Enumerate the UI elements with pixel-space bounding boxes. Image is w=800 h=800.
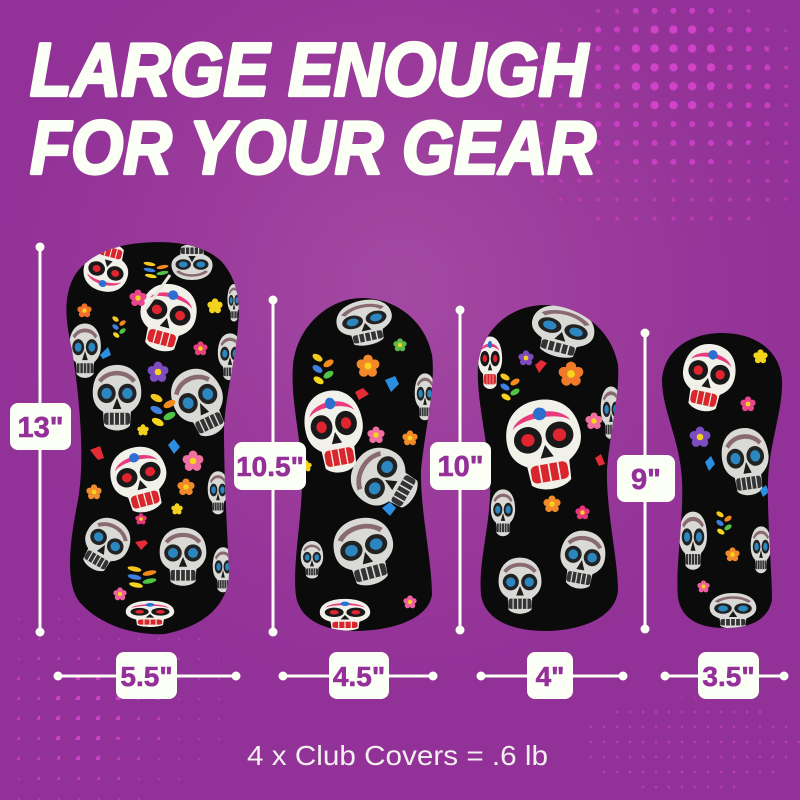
width measure: 5.5 inches [54,652,240,699]
title: FOR YOUR GEAR [30,106,596,190]
width measure: 4.5 inches: 4.5" [333,661,385,692]
club cover 1: driver [60,238,245,638]
width measure: 4.5 inches [278,652,438,699]
height measure: 10.5 inches: 10.5" [236,451,304,482]
height measure: 9 inches [617,328,675,634]
height measure: 10.5 inches [234,296,306,636]
width measure: 4 inches [476,652,628,699]
club cover 3: hybrid [478,305,618,631]
height measure: 9 inches: 9" [631,464,661,496]
height measure: 10 inches: 10" [437,451,484,483]
club cover 4: putter [662,333,782,628]
width measure: 4 inches: 4" [536,661,564,692]
width measure: 3.5 inches [660,652,788,699]
height measure: 13 inches: 13" [17,412,64,444]
weight note: 4 x Club Covers = .6 lb [247,740,548,771]
club cover 2: fairway wood [292,298,433,631]
title [30,28,596,190]
halftone dots: bottom right [580,697,800,793]
height measure: 13 inches [10,242,71,636]
width measure: 5.5 inches: 5.5" [120,661,173,692]
height measure: 10 inches [430,306,491,634]
title: LARGE ENOUGH [30,28,590,112]
halftone dots: top right [513,0,800,235]
halftone dots: bottom left [0,590,230,800]
width measure: 3.5 inches: 3.5" [702,661,755,692]
